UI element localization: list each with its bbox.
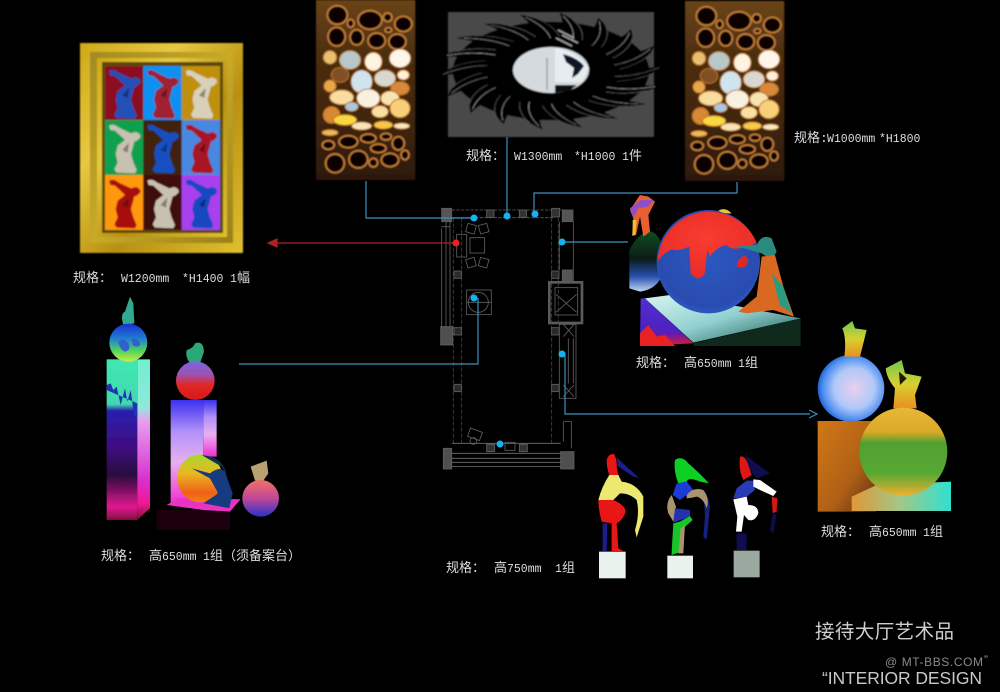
spec: vinyl: W1300mm bbox=[514, 151, 562, 164]
panel: vinyl swirl mirror bbox=[437, 12, 665, 137]
seating group bbox=[457, 223, 489, 268]
spec: spheres: 组 bbox=[930, 525, 943, 540]
figurine 3 bbox=[733, 455, 777, 577]
green sphere bbox=[859, 408, 947, 496]
spec: columns: 1 bbox=[203, 551, 210, 564]
panel: ring mirror left bbox=[316, 0, 415, 180]
spec: spheres: 规格： bbox=[821, 524, 860, 540]
back sphere bbox=[629, 232, 665, 292]
spec: ring mirror: *H1800 bbox=[879, 133, 921, 146]
spec: columns: 规格： bbox=[101, 548, 140, 564]
panel: framed pop-art discus thrower painting bbox=[80, 43, 243, 253]
spec: vinyl: 规格： bbox=[466, 148, 505, 164]
leader: vinyl bbox=[506, 137, 508, 216]
big sphere bbox=[657, 209, 760, 313]
spec: spheres: 650mm bbox=[882, 527, 917, 540]
title: 接待大厅艺术品 bbox=[815, 621, 954, 643]
left column bbox=[107, 359, 150, 520]
spec: sisyphus: 650mm bbox=[697, 358, 732, 371]
spec: figurines: 高 bbox=[494, 560, 507, 576]
orange box bbox=[818, 421, 876, 512]
spec: sisyphus: 组 bbox=[745, 356, 758, 371]
watermark: closing quote: ” bbox=[984, 653, 988, 667]
spec: sisyphus: 规格： bbox=[636, 355, 675, 371]
spec: sisyphus: 1 bbox=[738, 358, 745, 371]
spec: figurines: 规格： bbox=[446, 560, 485, 576]
spec: ring mirror: 规格: bbox=[794, 130, 828, 146]
floor plan bbox=[441, 208, 582, 469]
spec: painting: 规格： bbox=[73, 270, 112, 286]
watermark: brand: “INTERIOR DESIGN bbox=[822, 668, 982, 688]
base and lower sphere bbox=[157, 454, 241, 530]
leader: painting bbox=[272, 242, 456, 244]
spec: painting: 幅 bbox=[237, 271, 250, 286]
arrowhead left bbox=[268, 239, 277, 247]
spec: spheres: 高 bbox=[869, 524, 882, 540]
figurine 2 bbox=[667, 458, 710, 578]
spec: ring mirror: W1000mm bbox=[827, 133, 875, 146]
right wall and elevator bbox=[549, 222, 582, 398]
plinth bbox=[467, 290, 491, 315]
spec: vinyl: *H1000 bbox=[574, 151, 616, 164]
spec: figurines: 组 bbox=[562, 561, 575, 576]
panel: blue and green spheres sculpture bbox=[818, 321, 951, 512]
base slab bbox=[852, 482, 951, 511]
middle sphere bbox=[176, 343, 215, 400]
leader: sisyphus bbox=[562, 241, 628, 243]
blue sphere bbox=[818, 355, 884, 422]
columns bbox=[454, 271, 559, 392]
spec: columns: 650mm bbox=[162, 551, 197, 564]
leader: right mirror bbox=[534, 182, 737, 214]
spec: figurines: 1 bbox=[555, 563, 562, 576]
spec: columns: 组（须备案台） bbox=[210, 548, 301, 564]
top edge bbox=[452, 208, 573, 222]
spec: painting: W1200mm bbox=[121, 273, 169, 286]
spec: spheres: 1 bbox=[923, 527, 930, 540]
bottom wall bbox=[443, 422, 574, 469]
kneeling figure bbox=[733, 237, 794, 317]
spec: painting: *H1400 bbox=[182, 273, 224, 286]
panel: ring mirror right bbox=[685, 1, 784, 181]
left wall bbox=[441, 208, 453, 345]
location dots bbox=[452, 210, 566, 448]
spec: figurines: 750mm bbox=[507, 563, 542, 576]
watermark: site: @ MT-BBS.COM bbox=[885, 655, 983, 669]
leader: columns bbox=[239, 298, 478, 364]
spec: vinyl: 1 bbox=[622, 151, 629, 164]
middle column bbox=[171, 400, 217, 503]
figurine 1 bbox=[598, 454, 643, 578]
leader: left mirror bbox=[366, 181, 474, 218]
leader: spheres bbox=[565, 354, 810, 414]
right sphere bbox=[242, 461, 279, 517]
hand on blue sphere bbox=[842, 321, 867, 357]
interior dashed grid bbox=[453, 218, 558, 445]
spec: columns: 高 bbox=[149, 548, 162, 564]
spec: painting: 1 bbox=[230, 273, 237, 286]
plinth bbox=[640, 295, 801, 346]
panel: sisyphus sculpture bbox=[629, 195, 801, 346]
hand on green sphere bbox=[886, 360, 922, 408]
top sphere bbox=[109, 297, 147, 362]
spec: sisyphus: 高 bbox=[684, 355, 697, 371]
arrowhead right bbox=[809, 410, 817, 418]
small figure bbox=[630, 195, 655, 237]
spec: vinyl: 件 bbox=[629, 149, 642, 164]
panel: three handstand figurines bbox=[598, 454, 777, 578]
leader lines and markers bbox=[239, 137, 817, 418]
panel: glowing column sculptures bbox=[107, 297, 279, 530]
